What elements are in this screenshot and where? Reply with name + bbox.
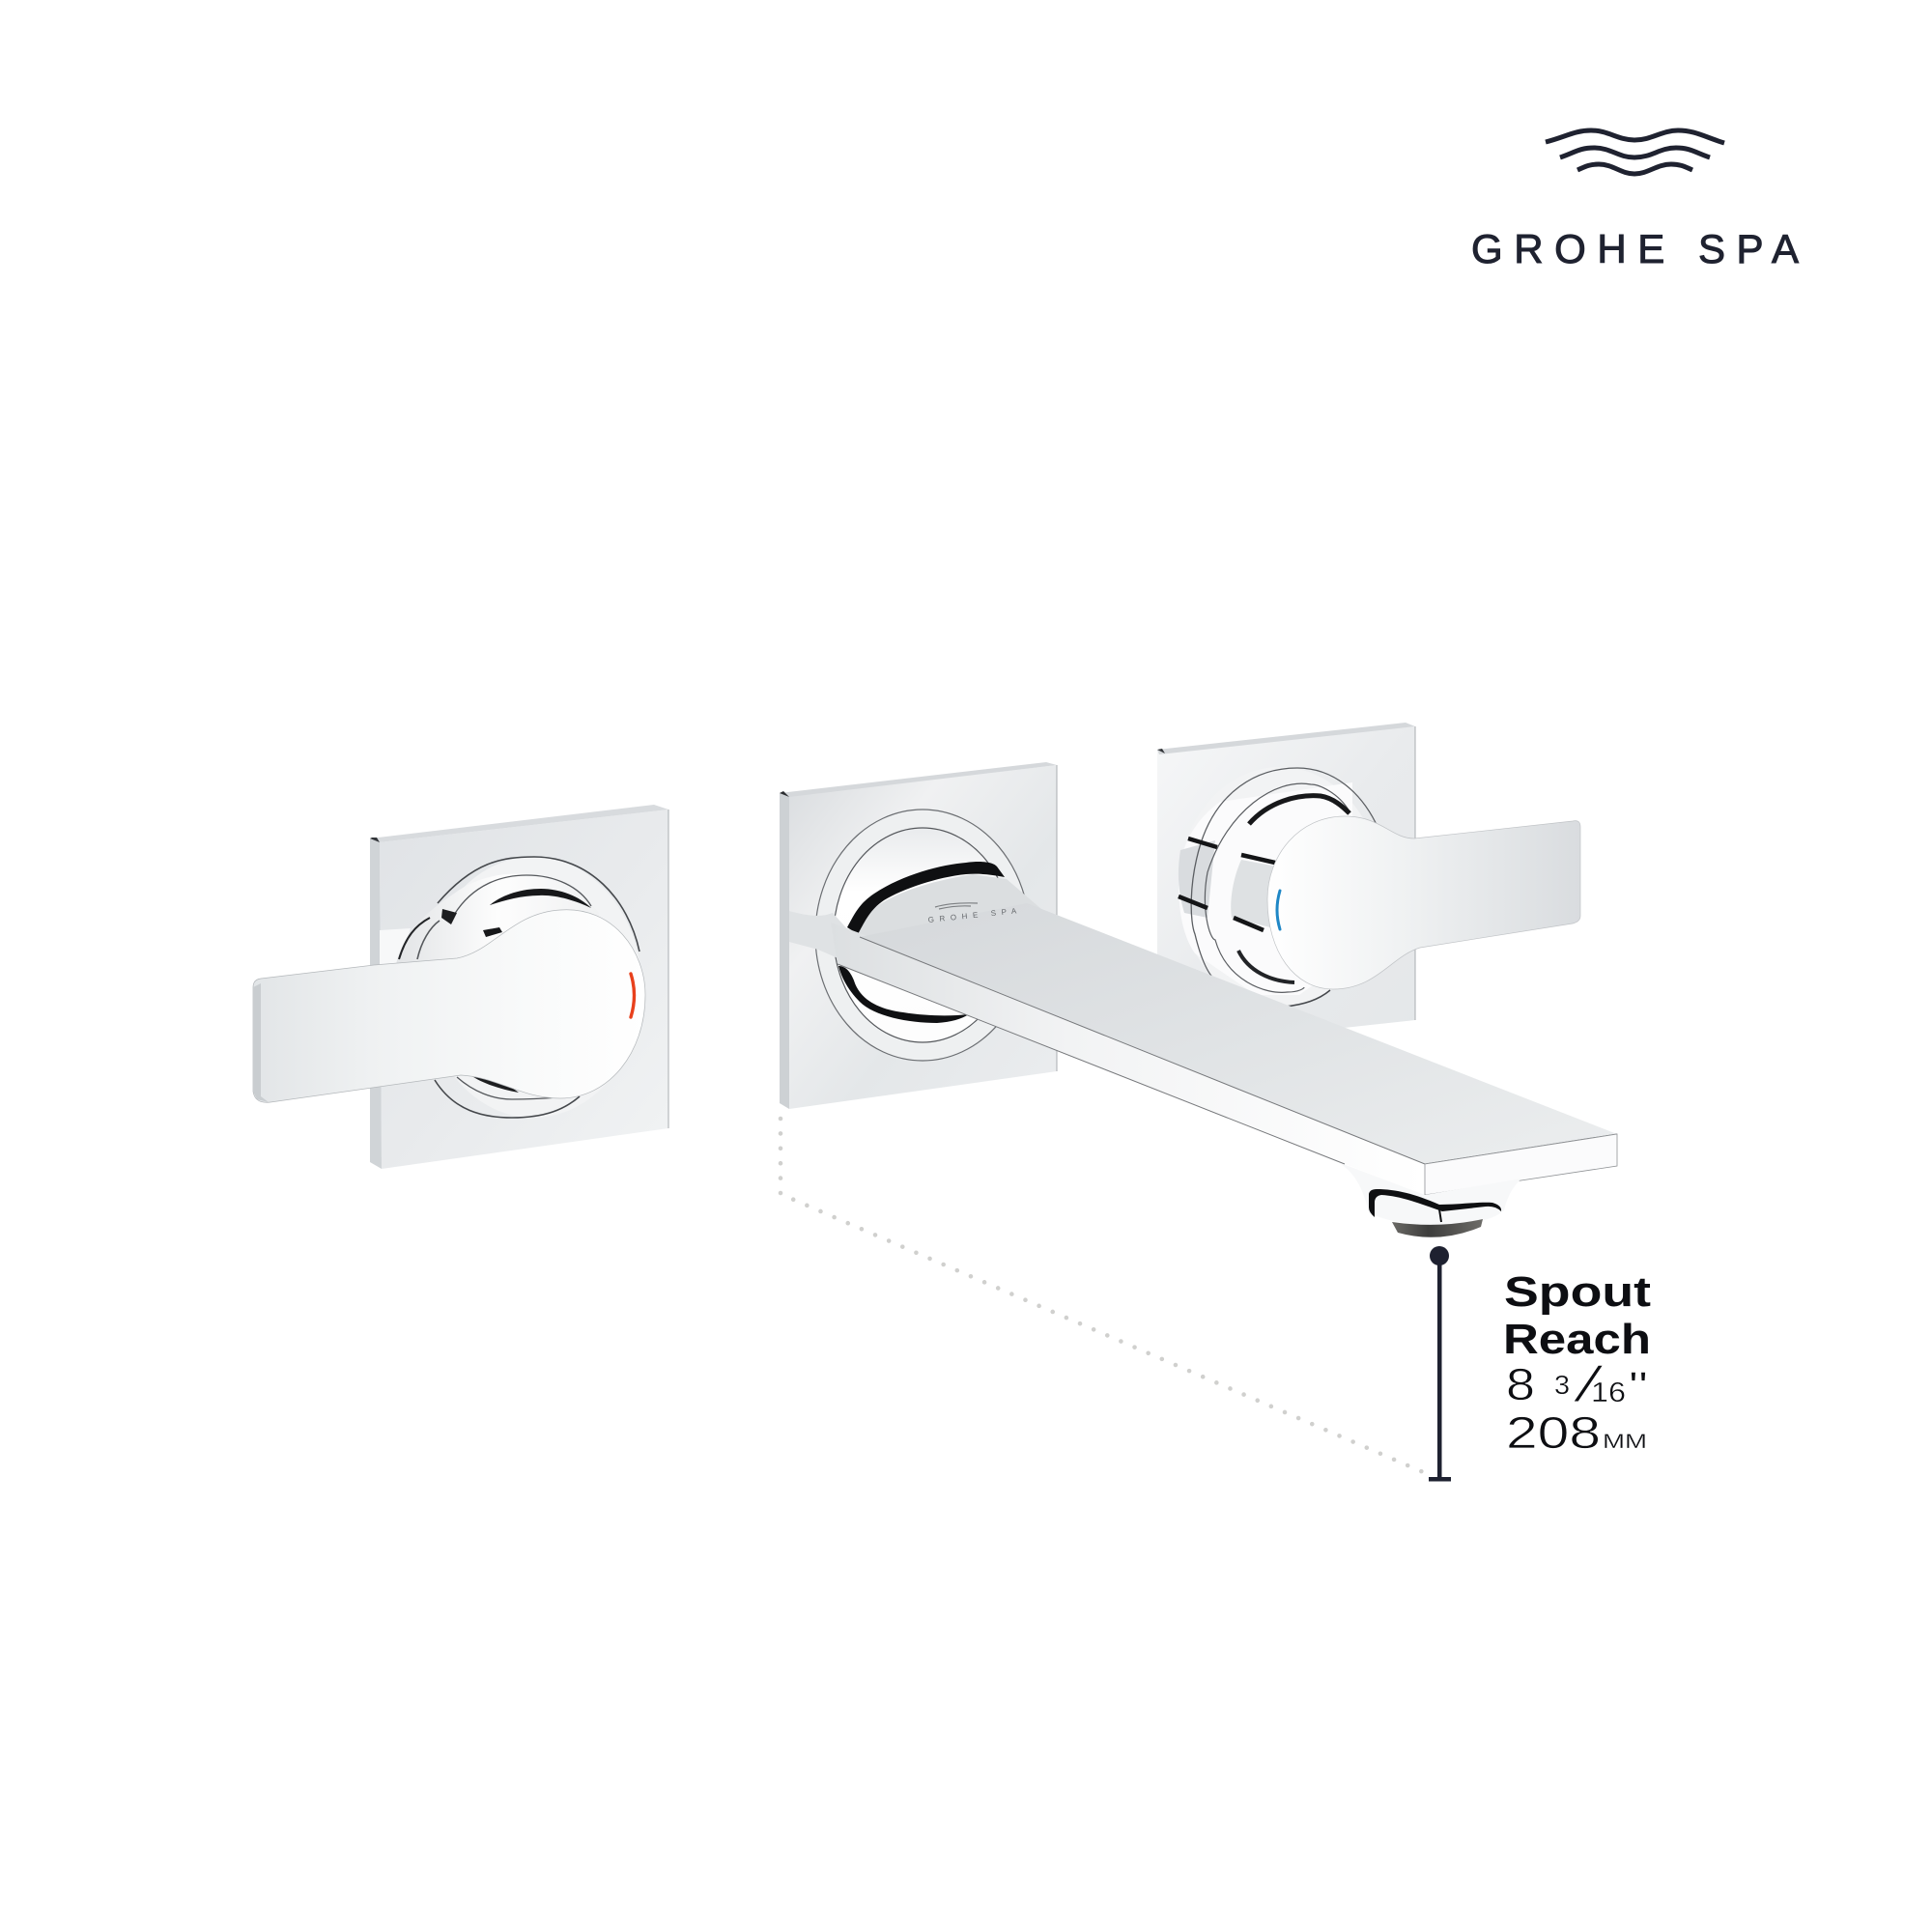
centre wall plate	[780, 762, 1057, 1109]
metric measurement	[1506, 1407, 1647, 1458]
inch measurement	[1506, 1358, 1648, 1412]
engraved logo on dome: GROHE SPA	[927, 906, 1017, 924]
left lever handle	[253, 910, 645, 1102]
label heading: Reach	[1503, 1316, 1651, 1363]
dark reflection lower	[838, 966, 969, 1023]
logo: GROHE SPA	[1471, 130, 1799, 271]
spout reach label	[1503, 1268, 1651, 1458]
label heading	[1503, 1268, 1651, 1363]
inch measurement: 8	[1506, 1359, 1535, 1409]
spout assembly (centre)	[780, 762, 1617, 1237]
spout mounting rings	[815, 810, 1030, 1061]
hot indicator: red mark	[631, 974, 634, 1017]
spout base highlight	[789, 911, 860, 968]
hot water handle assembly (left)	[253, 805, 668, 1169]
dotted measurement guide	[781, 1119, 1428, 1474]
left wall plate	[370, 805, 668, 1169]
inch measurement: 3	[1554, 1370, 1570, 1400]
right chrome escutcheon rings	[1179, 767, 1381, 1007]
cold indicator: blue mark	[1277, 891, 1280, 929]
spout side face	[831, 923, 1425, 1195]
icon: water waves	[1546, 130, 1724, 174]
inch measurement: "	[1629, 1363, 1648, 1408]
nozzle reflections	[1369, 1189, 1501, 1222]
left lever end bevel	[253, 983, 269, 1102]
spout front face	[1425, 1134, 1617, 1195]
label heading: Spout	[1504, 1268, 1651, 1316]
metric measurement: MM	[1603, 1431, 1647, 1453]
dimension marker	[1429, 1246, 1451, 1482]
spout top face	[860, 903, 1617, 1164]
chrome dome upper	[855, 874, 1063, 1021]
brand name: GROHE SPA	[1471, 226, 1799, 271]
inch measurement: /	[1570, 1358, 1605, 1412]
right wall plate	[1157, 723, 1415, 1048]
spout edges	[838, 937, 1617, 1164]
metric measurement: 208	[1506, 1407, 1601, 1458]
dark reflection upper	[847, 862, 1005, 934]
cold water handle assembly (right)	[1157, 723, 1580, 1048]
left chrome escutcheon rings	[396, 857, 641, 1118]
inch measurement: 16	[1591, 1378, 1626, 1408]
aerator	[1392, 1219, 1483, 1237]
nozzle flare	[1338, 1162, 1521, 1225]
right lever handle	[1267, 816, 1580, 989]
